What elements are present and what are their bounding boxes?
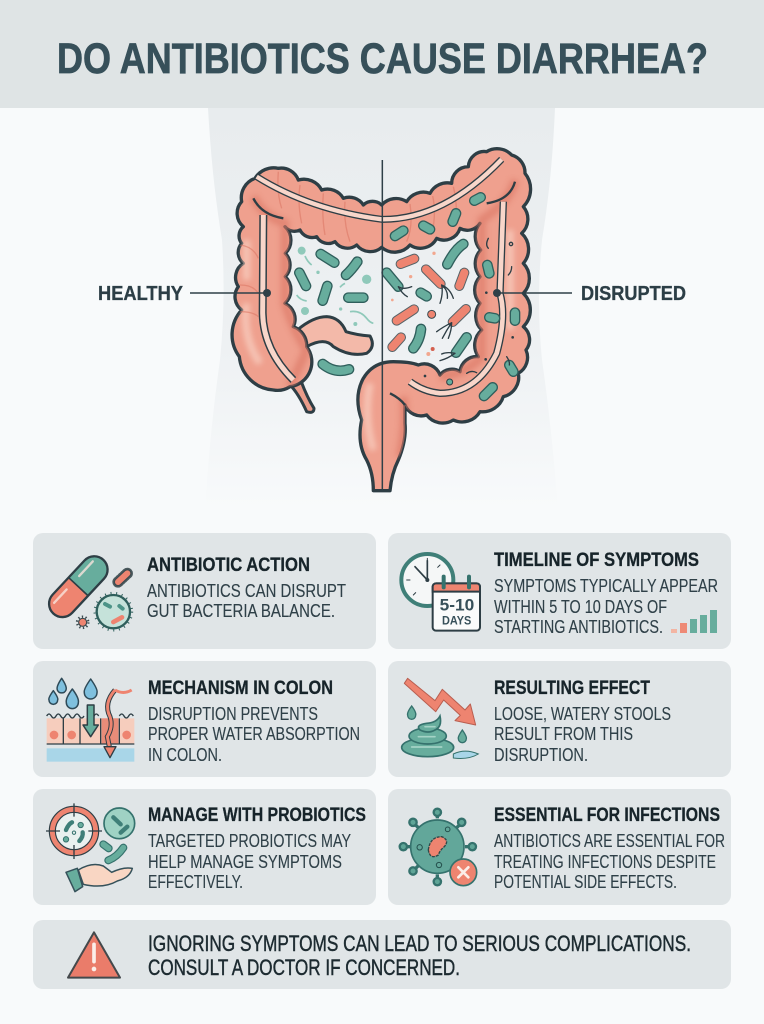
text: antibiotic action: ANTIBIOTIC ACTION	[147, 554, 310, 576]
torso silhouette	[205, 108, 558, 510]
text: timeline of symptoms: TIMELINE OF SYMPTOMS	[494, 549, 699, 571]
large intestine body	[232, 149, 531, 491]
text: resulting effect: RESULTING EFFECT	[494, 677, 650, 699]
icon: falling arrow and stool	[402, 678, 478, 758]
panel: timeline of symptoms	[388, 533, 731, 649]
title banner	[0, 0, 764, 108]
panel: mechanism in colon	[33, 661, 376, 777]
icon: warning triangle	[68, 932, 120, 978]
icon: capsule and bacteria	[44, 551, 132, 630]
text: mechanism in colon	[148, 677, 360, 765]
text: manage with probiotics: MANAGE WITH PROBIOTICS	[148, 804, 366, 826]
label: healthy	[98, 283, 271, 305]
appendix	[290, 378, 314, 412]
text: manage with probiotics	[148, 804, 366, 892]
text: mechanism in colon: PROPER WATER ABSORPTION	[148, 723, 360, 744]
colon diagram	[232, 149, 531, 491]
text: warning: CONSULT A DOCTOR IF CONCERNED.	[148, 955, 460, 980]
text: antibiotic action: ANTIBIOTICS CAN DISRUPT	[147, 580, 346, 601]
mini bar chart	[671, 610, 717, 633]
text: antibiotic action: GUT BACTERIA BALANCE.	[147, 600, 335, 621]
teal bacteria	[299, 197, 515, 396]
text: mechanism in colon: DISRUPTION PREVENTS	[148, 703, 318, 724]
icon: clock and calendar: 5-10	[440, 596, 474, 615]
text: essential for infections: POTENTIAL SIDE EFFECTS.	[494, 871, 677, 892]
text: mechanism in colon: MECHANISM IN COLON	[148, 677, 333, 699]
center divider	[380, 160, 385, 491]
panel: manage with probiotics	[33, 789, 376, 905]
label: disrupted	[493, 283, 686, 305]
text: resulting effect: DISRUPTION.	[494, 744, 588, 765]
icon: water absorption through cells	[47, 678, 134, 762]
text: manage with probiotics: HELP MANAGE SYMPTOMS	[148, 851, 342, 872]
text: resulting effect: RESULT FROM THIS	[494, 723, 633, 744]
panel: essential for infections	[388, 789, 731, 905]
text: timeline of symptoms	[494, 549, 718, 637]
text: resulting effect	[494, 677, 671, 765]
ileum	[297, 317, 372, 354]
icon: virus with cross badge	[400, 809, 477, 886]
panel: resulting effect	[388, 661, 731, 777]
central ribbon	[253, 159, 515, 405]
text: manage with probiotics: TARGETED PROBIOTICS MAY	[148, 830, 351, 851]
text: timeline of symptoms: WITHIN 5 TO 10 DAYS OF	[494, 596, 667, 617]
text: antibiotic action	[147, 554, 346, 621]
text: manage with probiotics: EFFECTIVELY.	[148, 871, 243, 892]
text: mechanism in colon: IN COLON.	[148, 744, 222, 765]
text: resulting effect: LOOSE, WATERY STOOLS	[494, 703, 671, 724]
healthy pale microbes	[297, 247, 373, 326]
callout: warning	[33, 920, 731, 989]
panel: antibiotic action	[33, 533, 376, 649]
label: healthy: HEALTHY	[98, 283, 184, 305]
icon: clock and calendar	[401, 554, 480, 631]
icon: target probiotics and hand	[46, 803, 135, 892]
icon: clock and calendar: DAYS	[442, 614, 471, 628]
salmon bacteria	[392, 259, 466, 347]
text: warning	[148, 931, 691, 980]
flagella and debris	[398, 238, 513, 385]
text: essential for infections	[494, 804, 725, 892]
text: timeline of symptoms: STARTING ANTIBIOTICS.	[494, 616, 663, 637]
label: disrupted: DISRUPTED	[581, 283, 686, 305]
